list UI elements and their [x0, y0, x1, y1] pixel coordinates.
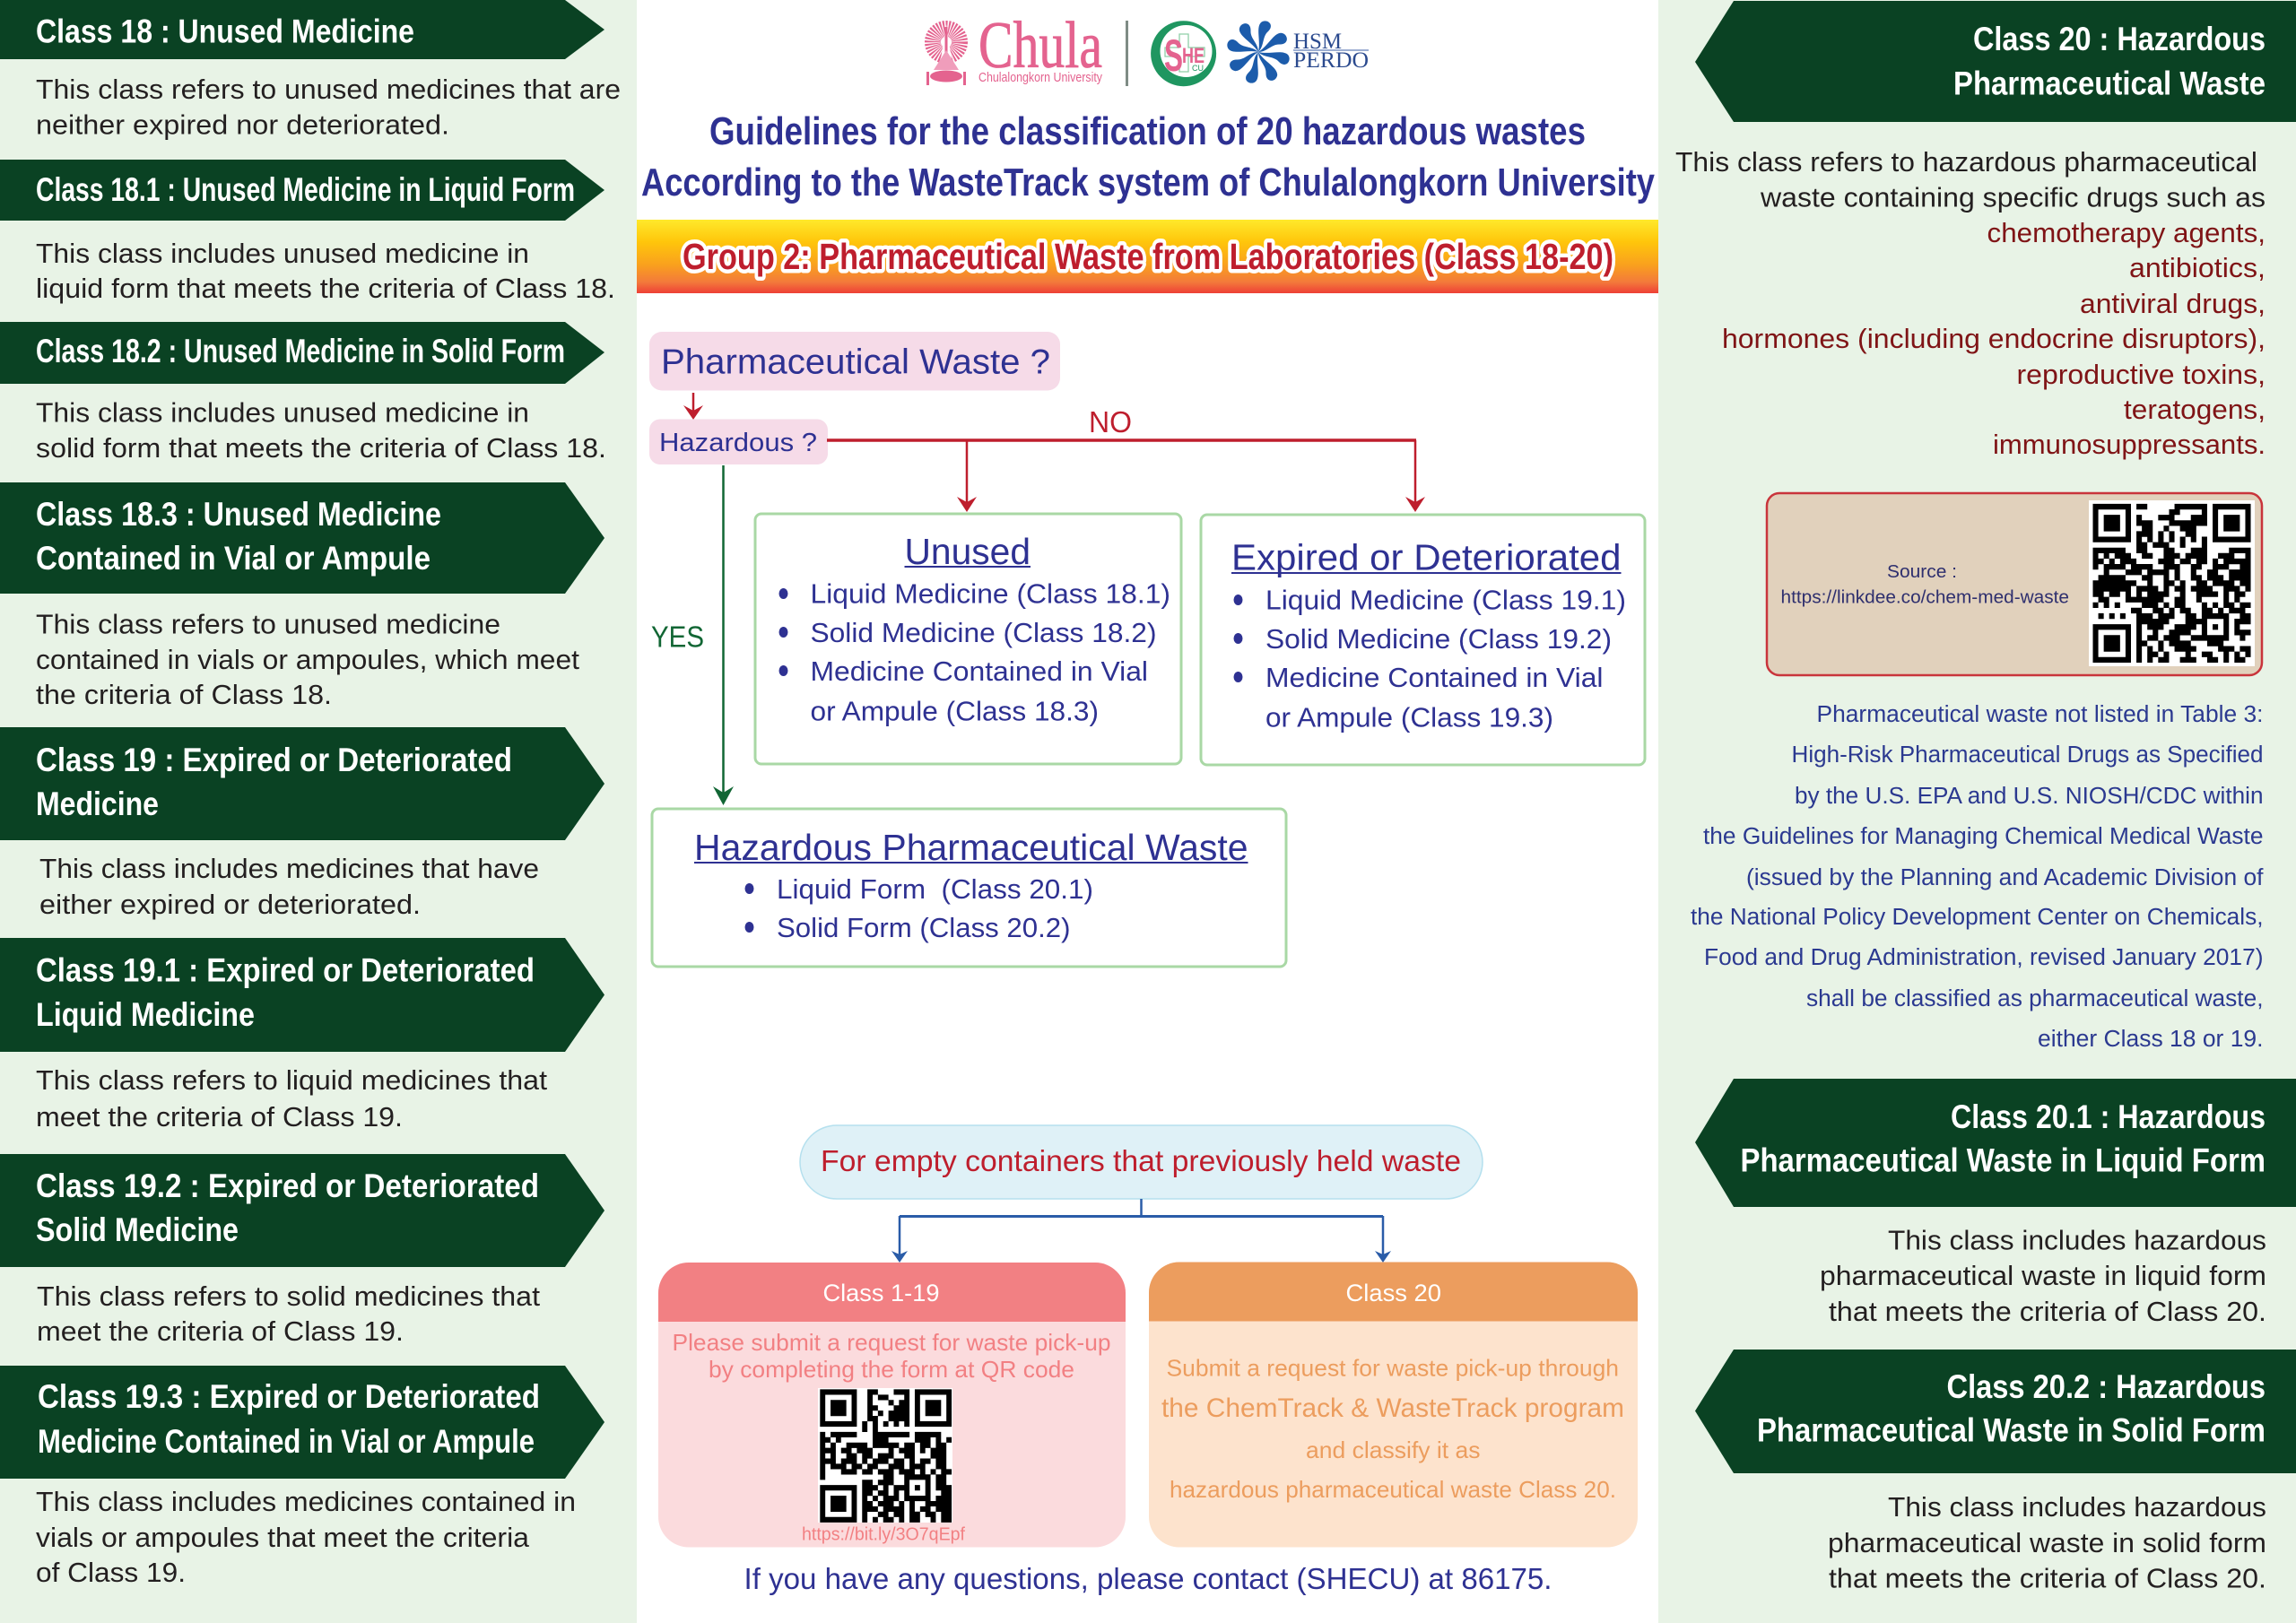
class 20.2 description: that meets the criteria of Class 20.: [1829, 1564, 2266, 1594]
class 18.3 banner: [0, 482, 604, 594]
group heading band: [637, 220, 1658, 293]
class 18.1 description: [36, 239, 615, 304]
flowchart: [649, 332, 1645, 967]
box: expired or deteriorated: Solid Medicine (Class 19.2): [1265, 623, 1612, 655]
class 19.3 banner: [0, 1366, 604, 1479]
class 20 description: immunosuppressants.: [1993, 430, 2266, 460]
callout: empty containers: For empty containers that previously held waste: [821, 1144, 1461, 1177]
class 18 description: neither expired nor deteriorated.: [36, 109, 449, 140]
class 18.1 description: liquid form that meets the criteria of Class 18.: [36, 273, 615, 304]
question: pharmaceutical waste: Pharmaceutical Waste ?: [661, 343, 1050, 382]
note: pharmaceutical waste not listed: (issued by the Planning and Academic Division of: [1746, 865, 2264, 890]
class 20 description: reproductive toxins,: [2016, 360, 2266, 390]
logo: SHE CU: HE: [1182, 44, 1205, 68]
arrow: YES branch: [713, 465, 734, 805]
class 20 banner: Pharmaceutical Waste: [1953, 65, 2266, 102]
class 18.3 description: contained in vials or ampoules, which meet: [36, 645, 580, 675]
class 19.2 description: [37, 1281, 541, 1347]
class 20 description: antiviral drugs,: [2080, 289, 2266, 319]
note: pharmaceutical waste not listed: the National Policy Development Center on Chemicals,: [1691, 905, 2264, 930]
note: pharmaceutical waste not listed: either Class 18 or 19.: [2038, 1027, 2264, 1052]
logo: HSM PERDO wordmark: [1293, 30, 1369, 73]
class 19.2 description: This class refers to solid medicines that: [37, 1281, 541, 1312]
class 19.2 banner: [0, 1154, 604, 1267]
box: unused: Unused: [904, 531, 1031, 572]
note: pharmaceutical waste not listed: Food and Drug Administration, revised January 2017): [1704, 945, 2264, 970]
source box: Source :: [1887, 562, 1957, 582]
contact line: If you have any questions, please contact (SHECU) at 86175.: [744, 1562, 1552, 1595]
box: unused: or Ampule (Class 18.3): [811, 696, 1099, 726]
class 19.3 description: [36, 1487, 576, 1588]
box: hazardous pharmaceutical waste: Hazardous Pharmaceutical Waste: [694, 827, 1248, 868]
card: class 1-19: [658, 1263, 1126, 1548]
class 19.1 banner: Class 19.1 : Expired or Deteriorated: [36, 952, 535, 988]
box: expired or deteriorated: Liquid Medicine (Class 19.1): [1265, 585, 1626, 615]
class 19.1 banner: Liquid Medicine: [36, 996, 255, 1033]
box: expired or deteriorated: Expired or Deteriorated: [1231, 536, 1622, 577]
box: hazardous pharmaceutical waste: Liquid Form (Class 20.1): [777, 873, 1093, 905]
logo: Chula emblem: [926, 24, 966, 85]
class 19.3 banner: Medicine Contained in Vial or Ampule: [38, 1423, 535, 1460]
logos: [926, 9, 1369, 86]
box: expired or deteriorated: Medicine Contained in Vial: [1265, 662, 1604, 693]
arrows: NO branch: [827, 440, 1425, 512]
class 20.2 description: [1828, 1492, 2266, 1594]
class 20 description: waste containing specific drugs such as: [1760, 183, 2266, 213]
box: unused: [755, 514, 1181, 764]
card: class 1-19: by completing the form at QR code: [709, 1356, 1074, 1383]
QR code: source link: [2089, 500, 2255, 666]
class 18 description: This class refers to unused medicines that are: [36, 74, 621, 105]
card: class 1-19: https://bit.ly/3O7qEpf: [802, 1524, 965, 1544]
title: Guidelines for the classification of 20 hazardous wastes: [709, 109, 1586, 153]
card: class 1-19: Please submit a request for waste pick-up: [673, 1329, 1110, 1356]
class 20 description: chemotherapy agents,: [1987, 218, 2266, 248]
class 20.2 banner: [1695, 1350, 2296, 1473]
card: class 20: Class 20: [1345, 1280, 1441, 1306]
source box: https://linkdee.co/chem-med-waste: [1781, 588, 2069, 608]
box: expired or deteriorated: or Ampule (Class 19.3): [1265, 701, 1553, 733]
class 19.3 description: vials or ampoules that meet the criteria: [36, 1523, 529, 1553]
class 19.3 description: This class includes medicines contained in: [36, 1487, 576, 1517]
logo: SHE CU: [1151, 21, 1216, 86]
class 18 description: [36, 74, 621, 140]
class 20.1 banner: [1695, 1079, 2296, 1207]
class 19 description: This class includes medicines that have: [39, 854, 539, 884]
class 20 description: This class refers to hazardous pharmaceutical: [1675, 147, 2257, 178]
class 18.1 description: This class includes unused medicine in: [36, 239, 529, 269]
class 20 description: teratogens,: [2124, 395, 2266, 425]
class 18.2 description: This class includes unused medicine in: [36, 398, 529, 429]
class 18.3 description: the criteria of Class 18.: [36, 680, 332, 710]
card: class 1-19: Class 1-19: [823, 1280, 940, 1306]
class 19.2 banner: Solid Medicine: [36, 1211, 239, 1248]
class 20.1 description: This class includes hazardous: [1888, 1225, 2266, 1255]
logo divider: [1126, 21, 1128, 86]
box: unused: Solid Medicine (Class 18.2): [811, 617, 1157, 648]
center white panel: [637, 0, 1658, 1623]
card: class 20: and classify it as: [1306, 1436, 1480, 1463]
card: class 20: [1149, 1263, 1638, 1548]
class 18.1 banner: Class 18.1 : Unused Medicine in Liquid Form: [36, 171, 575, 208]
question: pharmaceutical waste: [649, 332, 1060, 391]
arrows: empty containers branch: [891, 1199, 1391, 1263]
note: pharmaceutical waste not listed: Pharmaceutical waste not listed in Table 3:: [1817, 702, 2264, 727]
class 18.2 description: solid form that meets the criteria of Class 18.: [36, 433, 606, 464]
class 18.3 banner: Class 18.3 : Unused Medicine: [36, 496, 441, 533]
class 20 description: [1675, 147, 2266, 460]
question: hazardous: Hazardous ?: [659, 429, 817, 457]
class 19 description: [39, 854, 539, 920]
note: pharmaceutical waste not listed: the Guidelines for Managing Chemical Medical Waste: [1703, 824, 2264, 849]
class 20.2 description: This class includes hazardous: [1888, 1492, 2266, 1523]
class 18.3 banner: Contained in Vial or Ampule: [36, 540, 430, 577]
card: class 20: hazardous pharmaceutical waste Class 20.: [1170, 1476, 1616, 1503]
group heading band: Group 2: Pharmaceutical Waste from Laboratories (Class 18-20): [683, 236, 1613, 277]
box: unused: Medicine Contained in Vial: [811, 655, 1148, 687]
class 20.1 description: that meets the criteria of Class 20.: [1829, 1297, 2266, 1327]
logo: HSM PERDO wordmark: HSM: [1293, 30, 1342, 54]
title: According to the WasteTrack system of Chulalongkorn University: [641, 161, 1655, 204]
box: hazardous pharmaceutical waste: Solid Form (Class 20.2): [777, 912, 1071, 943]
class 20.1 description: pharmaceutical waste in liquid form: [1820, 1261, 2266, 1291]
label: YES: YES: [651, 621, 704, 653]
class 18.1 banner: [0, 160, 604, 221]
note: pharmaceutical waste not listed: [1691, 702, 2264, 1052]
class 19 banner: [0, 727, 604, 840]
class 18 banner: Class 18 : Unused Medicine: [36, 13, 414, 50]
card: class 20: the ChemTrack & WasteTrack program: [1161, 1393, 1624, 1423]
class 19.2 banner: Class 19.2 : Expired or Deteriorated: [36, 1167, 539, 1204]
class 19.1 description: meet the criteria of Class 19.: [36, 1102, 403, 1133]
arrow: to hazardous question: [683, 393, 703, 420]
box: expired or deteriorated: [1201, 515, 1645, 765]
note: pharmaceutical waste not listed: shall be classified as pharmaceutical waste,: [1806, 986, 2264, 1011]
class 19.3 banner: Class 19.3 : Expired or Deteriorated: [38, 1378, 540, 1415]
class 19.1 banner: [0, 938, 604, 1052]
class 20.2 description: pharmaceutical waste in solid form: [1828, 1528, 2266, 1558]
class 18 banner: [0, 0, 604, 59]
card: class 20: Submit a request for waste pick-up through: [1166, 1354, 1619, 1381]
class 19.1 description: This class refers to liquid medicines that: [36, 1065, 548, 1096]
box: unused: Liquid Medicine (Class 18.1): [811, 577, 1170, 610]
class 19.3 description: of Class 19.: [36, 1558, 186, 1588]
class 19.1 description: [36, 1065, 548, 1133]
class 19.2 description: meet the criteria of Class 19.: [37, 1316, 404, 1347]
label: NO: NO: [1089, 405, 1132, 438]
class 19 banner: Medicine: [36, 785, 159, 822]
class 18.3 description: This class refers to unused medicine: [36, 610, 500, 640]
logo: HSM swirl: [1227, 21, 1290, 83]
class 18.2 description: [36, 398, 606, 464]
title: [641, 109, 1655, 204]
panel: right class descriptions: [1675, 1, 2296, 1594]
logo: HSM PERDO wordmark: PERDO: [1293, 48, 1369, 73]
callout: empty containers: [800, 1125, 1483, 1199]
QR code: pick-up form: [818, 1388, 952, 1523]
class 18.2 banner: Class 18.2 : Unused Medicine in Solid Form: [36, 333, 565, 369]
class 18.3 description: [36, 610, 580, 710]
logo: SHE CU: CU: [1192, 64, 1204, 73]
panel: left class descriptions: [0, 0, 621, 1588]
class 20 description: antibiotics,: [2129, 253, 2266, 283]
class 20 description: hormones (including endocrine disruptors),: [1722, 324, 2266, 354]
logo: Chula wordmark: Chulalongkorn University: [978, 70, 1102, 85]
class 20.1 description: [1820, 1225, 2266, 1327]
question: hazardous: [649, 420, 828, 464]
class 18.2 banner: [0, 322, 604, 384]
source box: [1767, 493, 2262, 675]
class 20 banner: [1695, 1, 2296, 122]
class 19 banner: Class 19 : Expired or Deteriorated: [36, 742, 512, 778]
logo: SHE CU: S: [1164, 30, 1183, 81]
logo: Chula wordmark: Chula: [978, 9, 1102, 82]
box: hazardous pharmaceutical waste: [652, 809, 1286, 967]
class 19 description: either expired or deteriorated.: [39, 890, 421, 920]
note: pharmaceutical waste not listed: High-Risk Pharmaceutical Drugs as Specified: [1792, 742, 2264, 768]
note: pharmaceutical waste not listed: by the U.S. EPA and U.S. NIOSH/CDC within: [1795, 784, 2264, 809]
